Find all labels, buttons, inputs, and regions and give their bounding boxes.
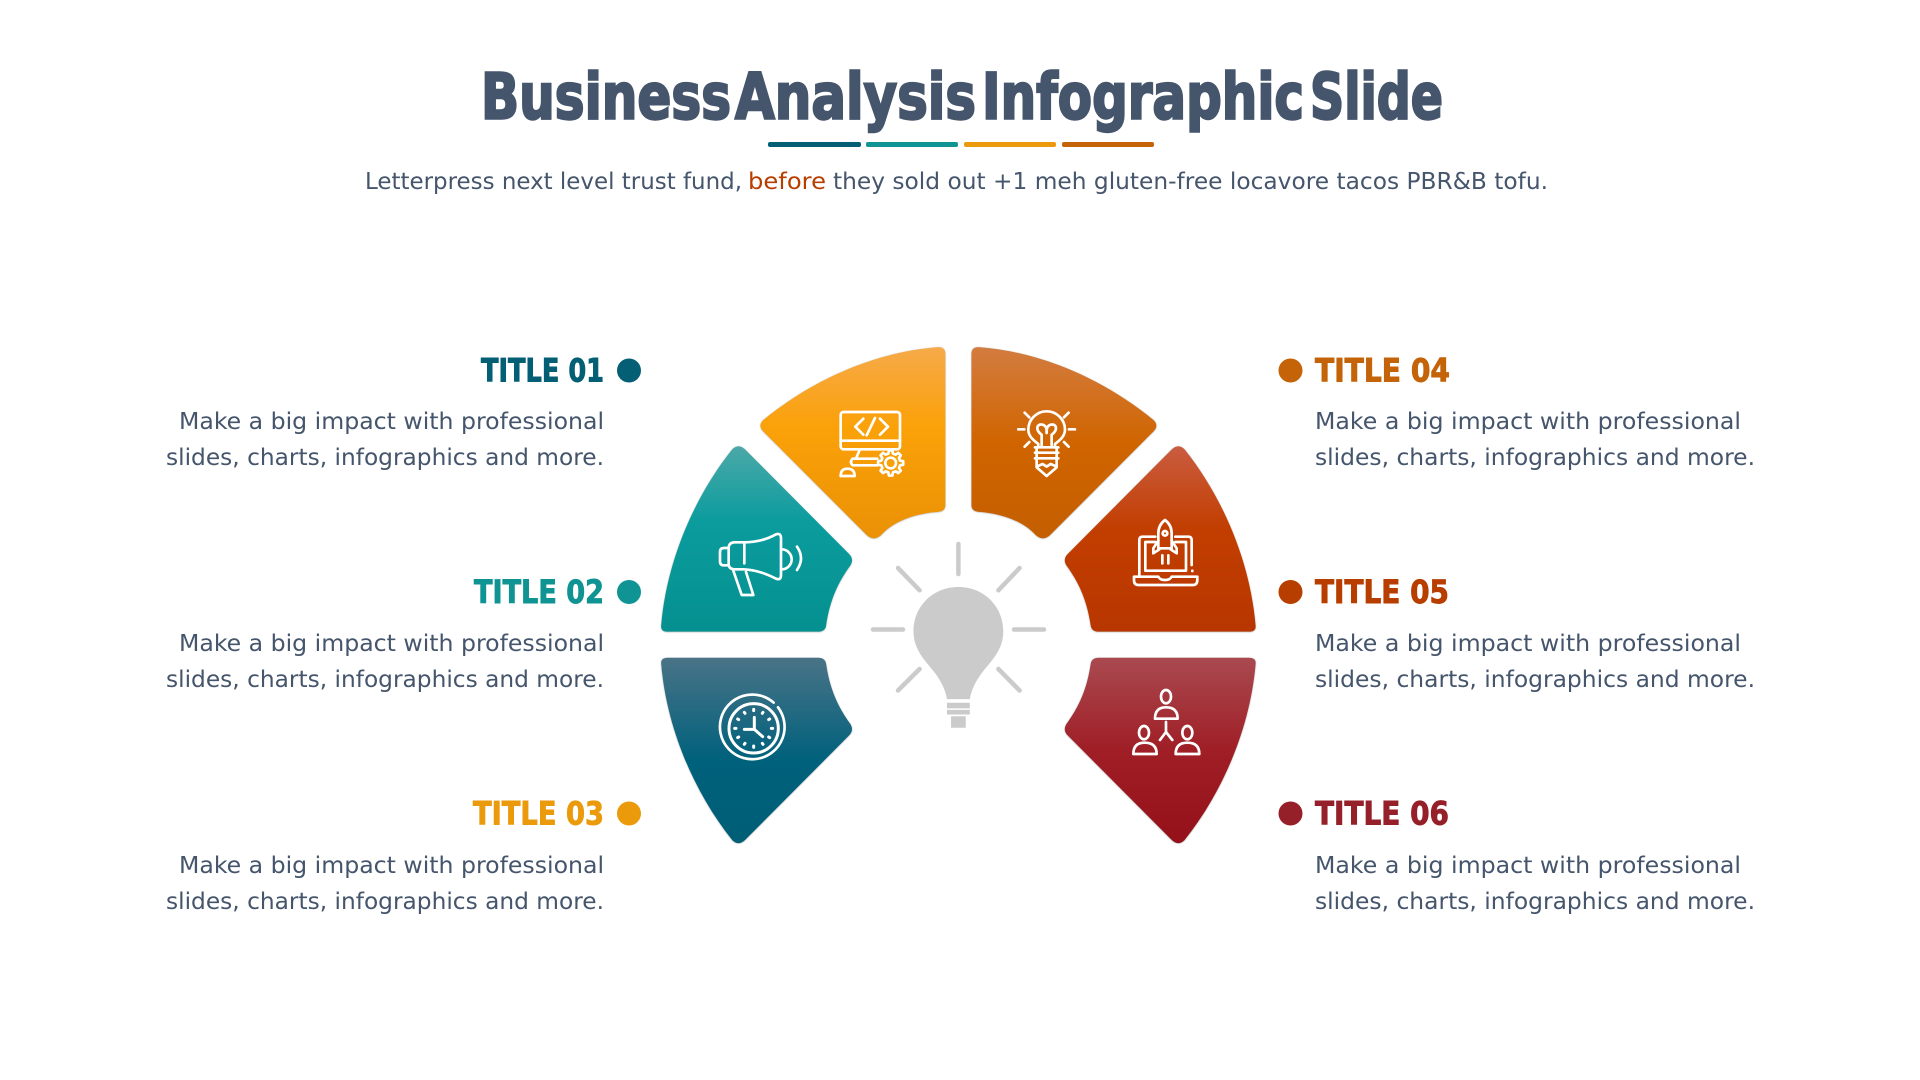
icon: light bulb pencil xyxy=(1018,411,1075,476)
panel: title 05 xyxy=(1278,573,1755,693)
icon: central light bulb with rays xyxy=(873,544,1044,728)
panel: title 05: TITLE 05 xyxy=(1315,573,1449,611)
title: Slide xyxy=(1310,60,1443,134)
subtitle: before xyxy=(748,167,826,195)
icon: megaphone xyxy=(720,534,801,595)
panel: title 01: TITLE 01 xyxy=(481,352,604,390)
segment: crimson (bottom right) xyxy=(1065,658,1256,843)
panel: title 04: Make a big impact with professional xyxy=(1315,407,1741,435)
panel: title 05: slides, charts, infographics and more. xyxy=(1315,665,1755,693)
icon: people hierarchy xyxy=(1133,690,1199,754)
title xyxy=(481,60,1443,134)
panel: title 03: TITLE 03 xyxy=(473,794,604,832)
title: Infographic xyxy=(982,60,1304,134)
panel: title 04 xyxy=(1278,352,1755,471)
panel: title 02: slides, charts, infographics and more. xyxy=(166,665,604,693)
segment: red orange (right) xyxy=(1065,446,1256,632)
panel: title 04: slides, charts, infographics and more. xyxy=(1315,443,1755,471)
title: Analysis xyxy=(735,60,976,134)
panel: title 02: Make a big impact with professional xyxy=(179,629,604,657)
panel: title 06: slides, charts, infographics and more. xyxy=(1315,887,1755,915)
panel: title 02: TITLE 02 xyxy=(474,573,604,611)
title underline: four colour bars xyxy=(768,142,1154,147)
segment: orange (top left) xyxy=(760,347,945,538)
segment: dark orange (top right) xyxy=(971,347,1156,538)
subtitle xyxy=(365,167,1548,195)
subtitle: Letterpress next level trust fund, xyxy=(365,167,742,195)
panel: title 01: Make a big impact with professional xyxy=(179,407,604,435)
title: Business xyxy=(481,60,731,134)
panel: title 01 xyxy=(166,352,641,471)
panel: title 06 xyxy=(1278,794,1755,915)
panel: title 03: Make a big impact with professional xyxy=(179,851,604,879)
panel: title 01: slides, charts, infographics and more. xyxy=(166,443,604,471)
icon: clock xyxy=(720,695,785,759)
panel: title 05: Make a big impact with professional xyxy=(1315,629,1741,657)
panel: title 04: TITLE 04 xyxy=(1315,352,1450,390)
icon: rocket launching from laptop xyxy=(1134,520,1197,585)
panel: title 02 xyxy=(166,573,641,693)
subtitle: they sold out +1 meh gluten-free locavore tacos PBR&B tofu. xyxy=(833,167,1548,195)
panel: title 03: slides, charts, infographics and more. xyxy=(166,887,604,915)
icon: monitor with code and gear xyxy=(841,412,903,476)
segment: dark blue (bottom left) xyxy=(661,658,852,843)
panel: title 06: TITLE 06 xyxy=(1315,794,1449,832)
panel: title 03 xyxy=(166,794,641,915)
panel: title 06: Make a big impact with professional xyxy=(1315,851,1741,879)
segment: teal (left) xyxy=(661,446,852,632)
